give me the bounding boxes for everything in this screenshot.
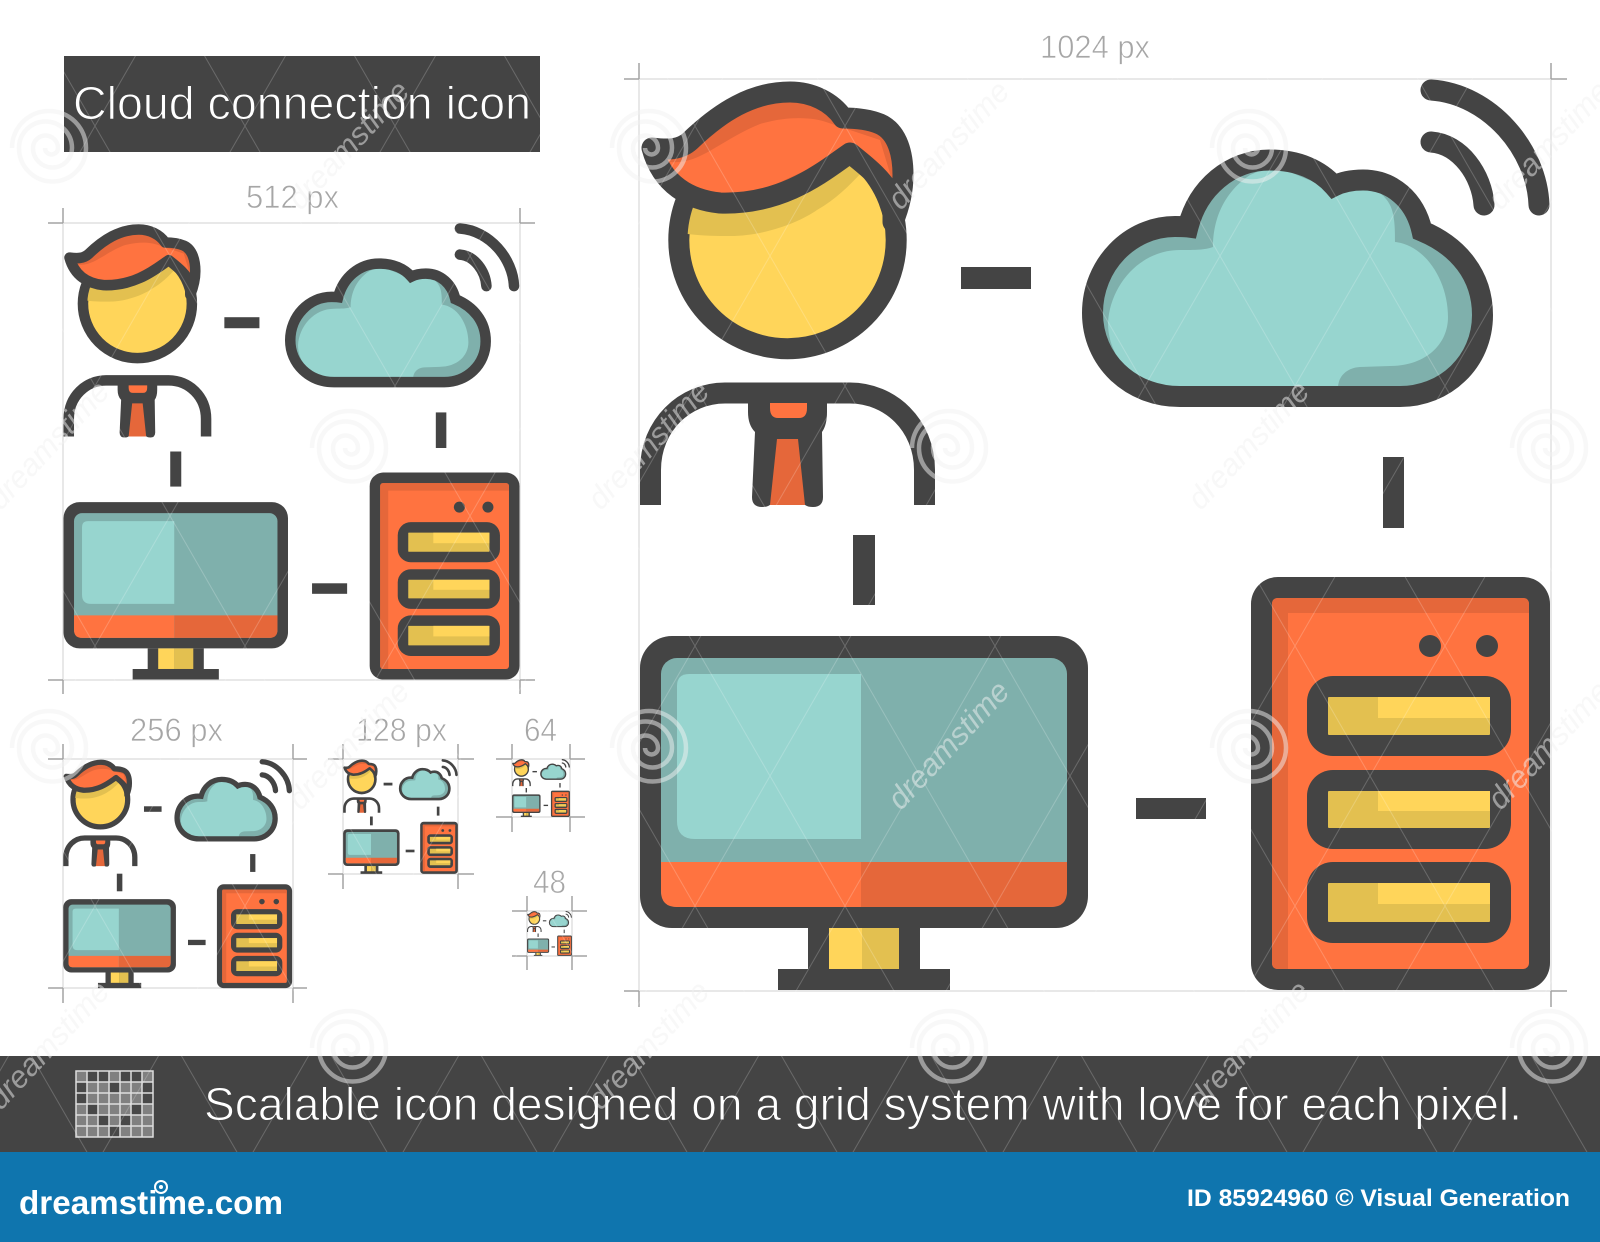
connector: monitor to server [1136,798,1206,819]
icon: pixel grid [76,1071,153,1137]
watermark overlay: dreamstime [280,674,416,816]
watermark overlay: dreamstime [580,974,716,1116]
size guide: 64 px [496,712,585,832]
server slot 1 [1307,676,1511,756]
size guide: 64 px: 64 [524,712,557,748]
watermark overlay: dreamstime [1180,374,1316,516]
watermark overlay: dreamstime [1180,974,1316,1116]
logo: dreamstime.com [19,1184,283,1221]
icon: monitor [640,636,1088,990]
icon: person face [679,131,896,349]
image id and credit: ID 85924960 © Visual Generation [1187,1185,1570,1212]
icon preview 128 px [343,760,458,874]
server status dots [1419,635,1498,657]
icon preview 256 px [63,762,292,988]
banner text: Scalable icon designed on a grid system with love for each pixel. [204,1078,1522,1130]
watermark overlay: dreamstime [280,74,416,216]
watermark overlay: dreamstime [580,374,716,516]
main icon 1024 px [640,90,1550,990]
icon: person shoulders [650,393,924,505]
icon: server [1251,577,1550,990]
icon: person hair [652,92,903,222]
watermark overlay: dreamstime [880,74,1016,216]
icon: cloud [1092,160,1482,396]
watermark overlay: dreamstime [880,674,1016,816]
title banner [64,56,540,152]
icon preview 48 px [527,912,572,956]
size guide: 128 px: 128 px [356,712,447,748]
connector: person to monitor [853,535,875,605]
grid system banner [0,1056,1600,1152]
connector: person to cloud [961,267,1031,289]
server slot 3 [1307,862,1511,943]
size guide: 512 px: 512 px [246,179,339,215]
icon: necktie [748,395,827,507]
icon: wifi signal [1431,90,1539,205]
server slot 2 [1307,770,1511,849]
size guide: 48 px [512,864,587,970]
icon preview 64 px [512,760,570,817]
footer bar [0,1152,1600,1242]
size guide: 256 px [48,712,307,1003]
connector: cloud to server [1383,457,1404,528]
size guide: 256 px: 256 px [130,712,223,748]
icon preview 512 px [64,229,520,680]
size guide: 1024 px: 1024 px [1040,29,1150,65]
size guide: 48 px: 48 [533,864,566,900]
size guide: 128 px [328,712,474,889]
size guide: 512 px [48,179,535,694]
title banner: Cloud connection icon [73,77,531,129]
